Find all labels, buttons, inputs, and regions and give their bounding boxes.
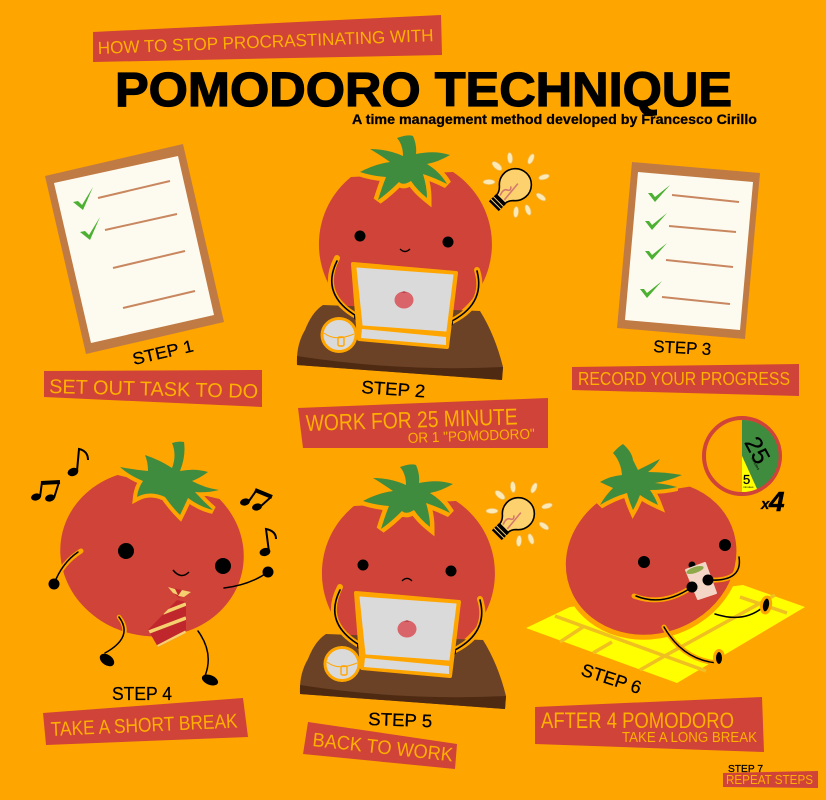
panel: step 3 checklist [617, 162, 760, 339]
multiplier [760, 486, 785, 517]
step 2 banner: WORK FOR 25 MINUTE [305, 403, 518, 436]
timer icon: 25 + 5 minutes: 5 [743, 472, 750, 487]
step 4 banner: TAKE A SHORT BREAK [50, 711, 239, 741]
step 3 banner [572, 364, 799, 396]
subtitle: A time management method developed by Francesco Cirillo [352, 112, 757, 127]
step 5 banner: BACK TO WORK [311, 729, 454, 766]
step 5 label: STEP 5 [368, 709, 433, 731]
step 6 banner: AFTER 4 POMODORO [541, 708, 734, 733]
step 6 banner [535, 697, 764, 752]
timer icon: 25 + 5 minutes: minutes [750, 456, 761, 471]
step 4 label: STEP 4 [112, 684, 172, 704]
panel: step 4 dancing tomato [30, 442, 276, 688]
multiplier: 4 [768, 486, 785, 517]
timer icon: 25 + 5 minutes: minutes [743, 485, 754, 489]
step 1 label: STEP 1 [131, 336, 195, 369]
step 2 banner [298, 398, 548, 448]
panel: step 5 tomato back at laptop [300, 464, 553, 709]
timer icon: 25 + 5 minutes [704, 418, 780, 494]
multiplier: x [760, 496, 770, 513]
step 4 banner [43, 698, 248, 745]
title: POMODORO TECHNIQUE [115, 64, 732, 117]
step 3 banner: RECORD YOUR PROGRESS [578, 368, 790, 389]
panel: step 1 checklist [45, 144, 224, 354]
step 7 banner: REPEAT STEPS [726, 773, 813, 787]
step 2 label: STEP 2 [361, 377, 426, 401]
step 6 label: STEP 6 [579, 660, 644, 698]
step 6 banner: TAKE A LONG BREAK [622, 729, 757, 746]
panel: step 2 tomato at laptop [297, 135, 550, 380]
step 1 banner: SET OUT TASK TO DO [49, 376, 258, 403]
step 7 label: STEP 7 [728, 763, 763, 775]
step 2 banner: OR 1 "POMODORO" [408, 427, 535, 447]
step 3 label: STEP 3 [653, 337, 712, 359]
timer icon: 25 + 5 minutes: 25 [739, 432, 775, 469]
heading banner: HOW TO STOP PROCRASTINATING WITH [97, 25, 434, 58]
heading banner [93, 15, 442, 62]
panel: step 6 tomato relaxing on blanket [526, 444, 805, 683]
